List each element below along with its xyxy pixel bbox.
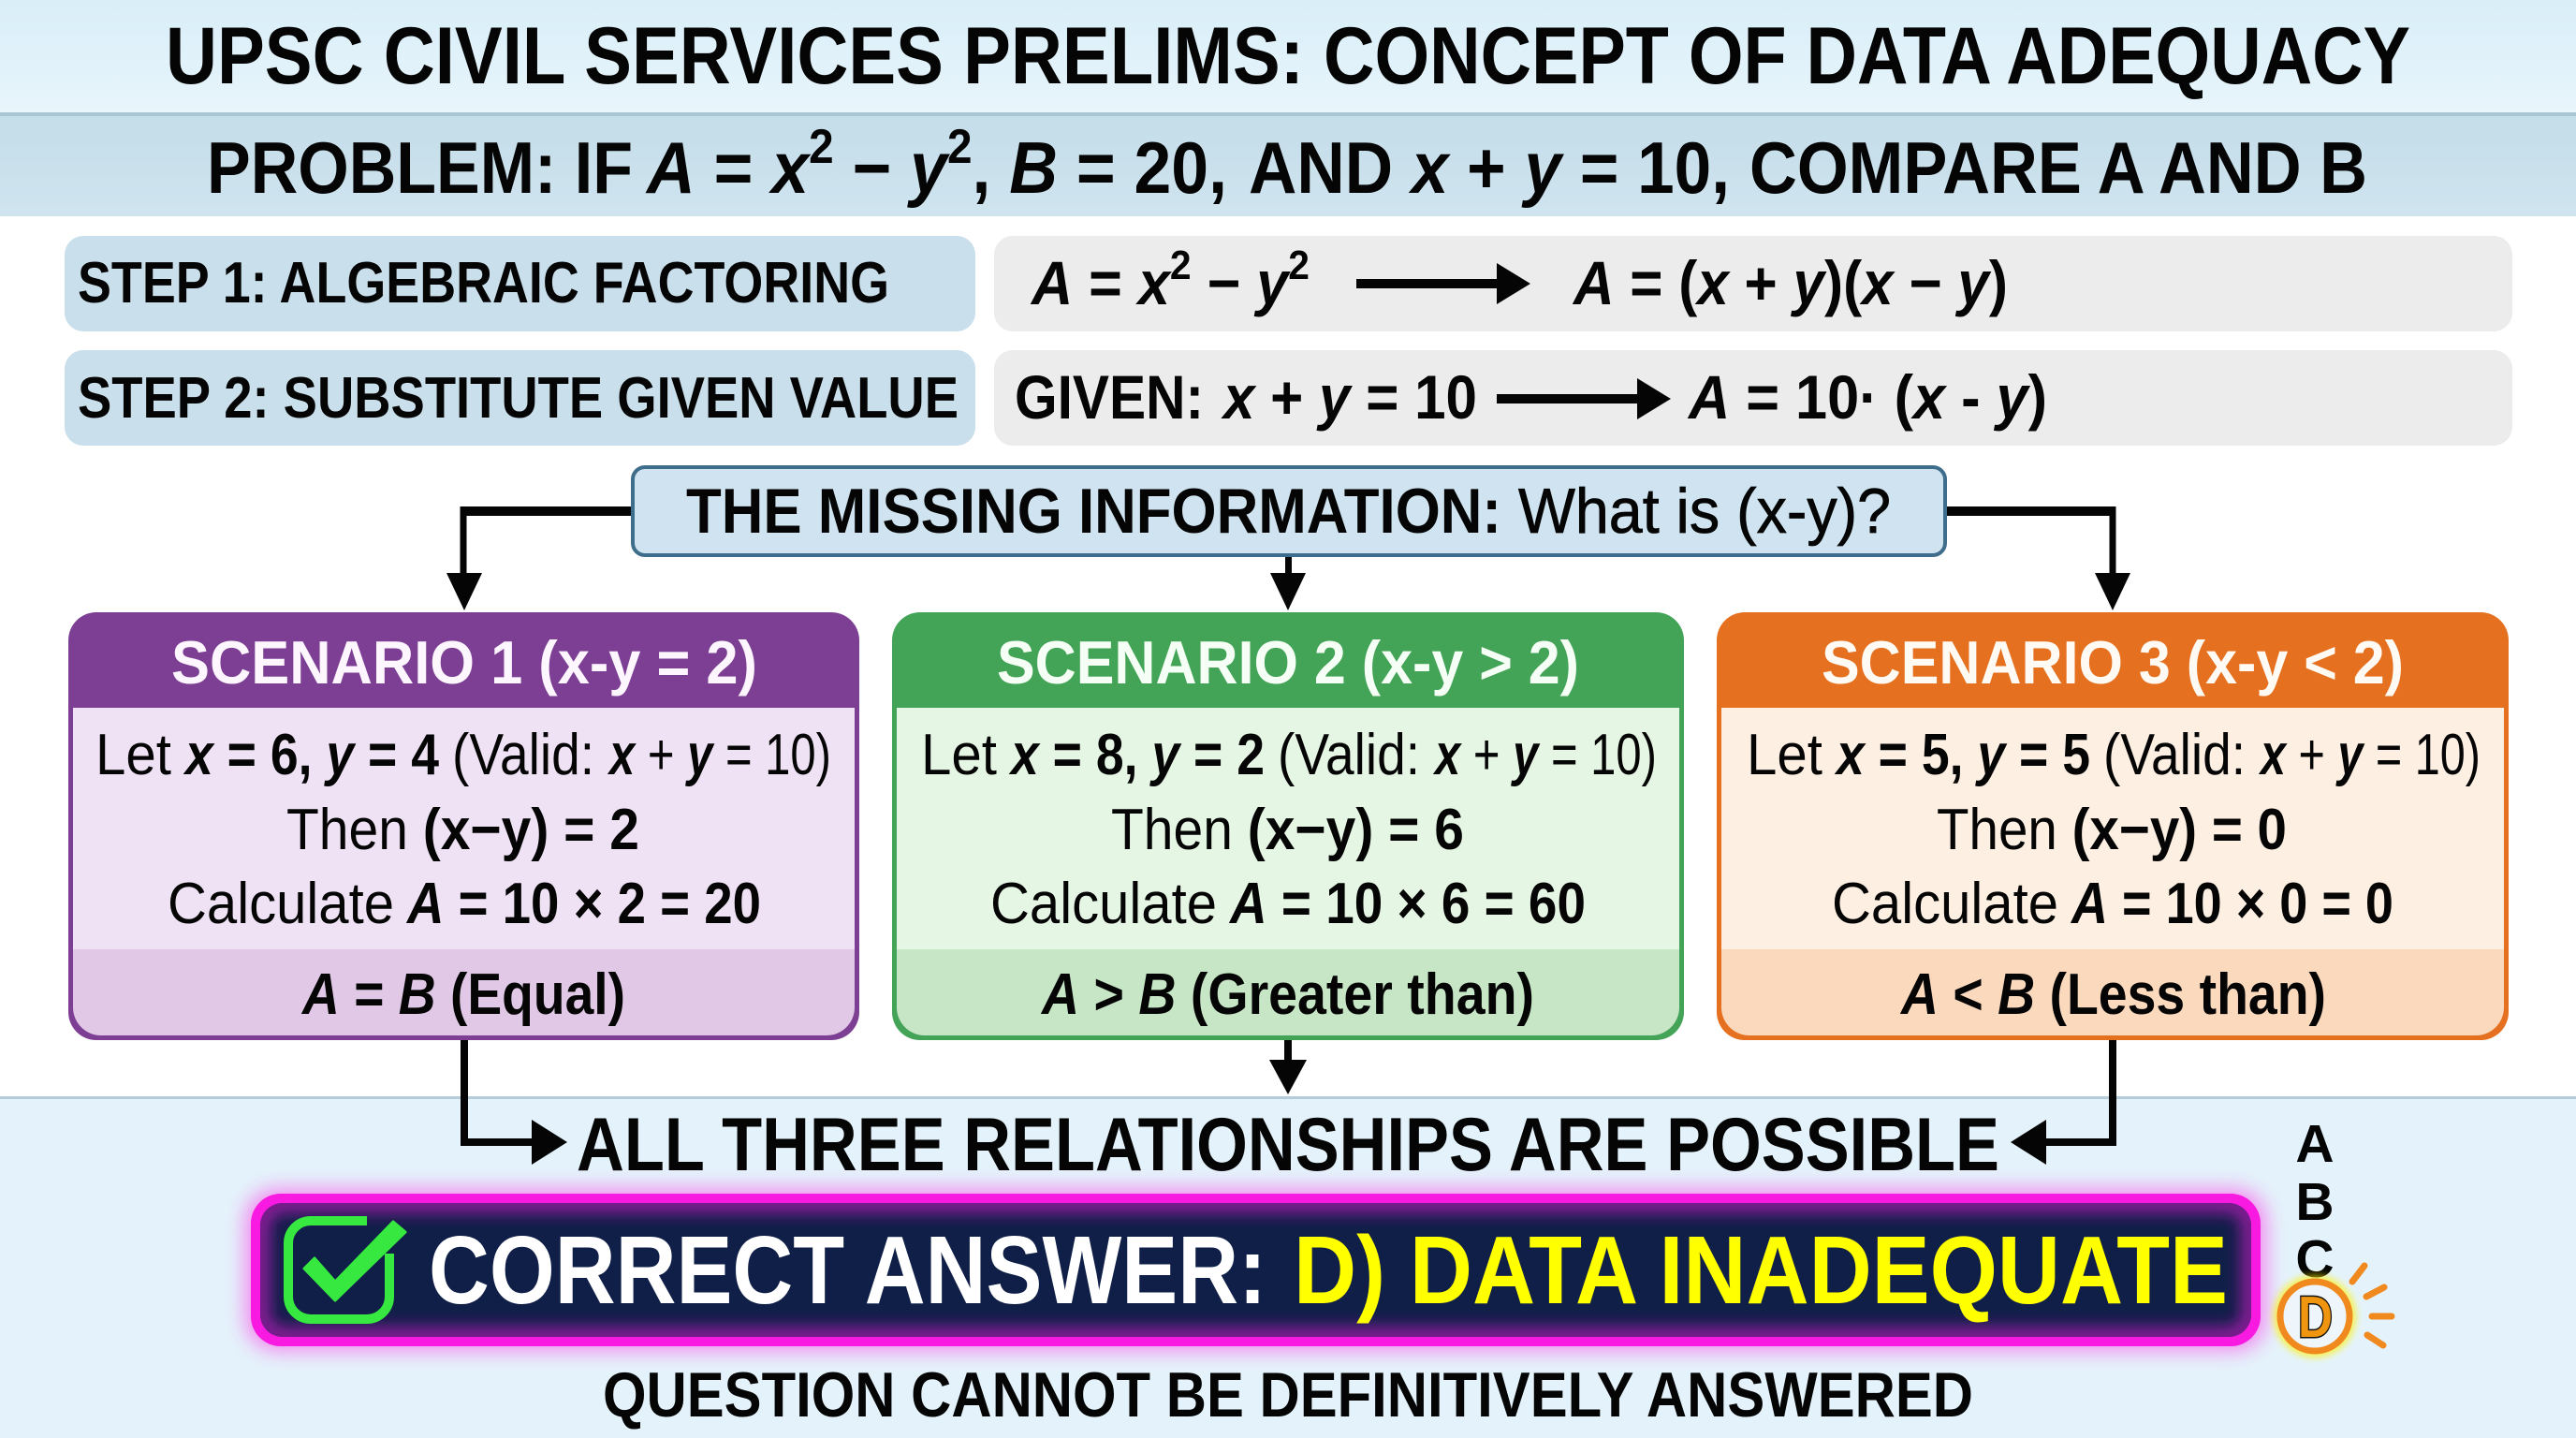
formula: A = x² − y²: A = x <box>1032 248 1173 317</box>
formula: substituted: A = 10· (x - y) <box>1687 362 2047 432</box>
arrow: missing info to scenario 3 <box>1945 506 2130 610</box>
scenario 1 calculation: Calculate <box>168 872 394 936</box>
scenario 1 values <box>95 723 831 787</box>
scenario 2 calculation: Calculate <box>990 872 1217 936</box>
scenario 3 calculation: Calculate <box>1832 872 2058 936</box>
title: CONCEPT OF DATA ADEQUACY <box>1324 11 2410 101</box>
problem statement text: y <box>906 126 950 209</box>
conclusion heading: ALL THREE RELATIONSHIPS ARE POSSIBLE <box>577 1103 1999 1187</box>
icon: green check box <box>288 1221 405 1319</box>
icon: multiple choice options with D highlighted: B <box>2295 1172 2334 1232</box>
formula: A = x² − y²: y <box>1254 248 1291 317</box>
scenario 3 calculation: A = 10 × 0 = 0 <box>2070 872 2393 936</box>
problem statement text: A = x <box>647 126 812 209</box>
scenario 1 difference: Then (x−y) = 2 <box>286 798 639 862</box>
scenario 1 calculation <box>168 872 761 936</box>
scenario 2 values: Let <box>921 723 997 787</box>
problem statement text: COMPARE A AND B <box>1749 126 2367 209</box>
scenario 1 values: Let <box>95 723 171 787</box>
problem statement text: PROBLEM: IF <box>207 126 633 209</box>
callout: the missing information <box>633 467 1945 555</box>
scenario 1 result: A = B (Equal) <box>300 962 625 1027</box>
scenario 3 heading: SCENARIO 3 (x-y < 2) <box>1822 628 2404 697</box>
formula: given <box>1015 362 1477 432</box>
scenario 2 result: A > B (Greater than) <box>1040 962 1534 1027</box>
scenario 3 values <box>1747 723 2481 787</box>
scenario 3 values: x + y = 10) <box>2259 723 2481 787</box>
formula: given: GIVEN: <box>1015 362 1204 432</box>
problem statement text <box>207 120 2367 209</box>
problem statement text: 2 <box>947 120 973 174</box>
panel: step 1 label <box>65 236 975 331</box>
scenario 3 calculation <box>1832 872 2393 936</box>
panel: step 2 label: STEP 2: SUBSTITUTE GIVEN VALUE <box>78 366 959 431</box>
arrow: scenario 1 to conclusion <box>464 1040 567 1165</box>
panel: conclusion background <box>0 1096 2576 1438</box>
scenario 2 values: x = 8, y = 2 <box>1008 723 1265 787</box>
panel: scenario 1 <box>68 612 859 1040</box>
scenario 3 difference: Then (x−y) = 0 <box>1937 798 2287 862</box>
scenario 1 values: x = 6, y = 4 <box>183 723 439 787</box>
problem statement text: , <box>973 126 1009 209</box>
callout: correct answer <box>245 1189 2266 1351</box>
scenario 3 values: Let <box>1747 723 1822 787</box>
scenario 2 values: x + y = 10) <box>1433 723 1657 787</box>
scenario 3 values: (Valid: <box>2103 723 2246 787</box>
formula: A = x² − y²: − <box>1192 248 1256 317</box>
scenario 2 values <box>921 723 1657 787</box>
scenario 2 difference: Then (x−y) = 6 <box>1111 798 1464 862</box>
panel: step 1 label: STEP 1: ALGEBRAIC FACTORING <box>78 251 889 315</box>
panel: step 2 formula <box>994 350 2512 446</box>
problem statement text: AND x + y = 10, <box>1249 126 1730 209</box>
formula: A = x² − y²: 2 <box>1170 242 1192 288</box>
scenario 2 heading: SCENARIO 2 (x-y > 2) <box>997 628 1579 697</box>
arrow: scenario 2 to conclusion <box>1269 1040 1307 1094</box>
problem statement text: B = 20, <box>1009 126 1242 209</box>
arrow: substitute <box>1497 378 1671 419</box>
title: UPSC CIVIL SERVICES PRELIMS: <box>166 11 1304 101</box>
icon: multiple choice options with D highlighted <box>2279 1114 2392 1352</box>
scenario 1 calculation: A = 10 × 2 = 20 <box>405 872 761 936</box>
panel: scenario 2 <box>892 612 1684 1040</box>
scenario 1 values: (Valid: <box>452 723 594 787</box>
scenario 2 calculation <box>990 872 1586 936</box>
panel: step 2 label <box>65 350 975 446</box>
panel: scenario 3 <box>1717 612 2509 1040</box>
formula: factored form: A = (x + y)(x − y) <box>1572 248 2008 317</box>
arrow: factoring <box>1356 263 1530 304</box>
formula: A = x² − y²: 2 <box>1288 242 1310 288</box>
scenario 3 result: A < B (Less than) <box>1899 962 2326 1027</box>
problem statement text: − <box>834 126 910 209</box>
answer label: CORRECT ANSWER: <box>429 1216 1266 1324</box>
arrow: scenario 3 to conclusion <box>2011 1040 2113 1165</box>
icon: multiple choice options with D highlighted: C <box>2295 1229 2334 1289</box>
scenario 2 calculation: A = 10 × 6 = 60 <box>1228 872 1586 936</box>
panel: problem statement band <box>0 112 2576 216</box>
scenario 3 values: x = 5, y = 5 <box>1834 723 2090 787</box>
formula: given: x + y = 10 <box>1221 362 1477 432</box>
arrow: missing info to scenario 1 <box>446 506 633 610</box>
title <box>166 11 2410 101</box>
panel: header background <box>0 0 2576 114</box>
answer value: D) DATA INADEQUATE <box>1294 1216 2228 1324</box>
footer statement: QUESTION CANNOT BE DEFINITIVELY ANSWERED <box>603 1359 1973 1431</box>
problem statement text: 2 <box>809 120 834 174</box>
scenario 2 values: (Valid: <box>1278 723 1420 787</box>
arrow: missing info to scenario 2 <box>1270 556 1306 610</box>
icon: multiple choice options with D highlighted: D <box>2298 1285 2333 1350</box>
panel: step 1 formula <box>994 236 2512 331</box>
scenario 1 heading: SCENARIO 1 (x-y = 2) <box>171 628 757 697</box>
callout: the missing information: What is (x-y)? <box>1518 476 1891 547</box>
callout: the missing information: THE MISSING INFORMATION: <box>686 476 1501 547</box>
scenario 1 values: x + y = 10) <box>607 723 831 787</box>
icon: multiple choice options with D highlighted: A <box>2295 1114 2334 1174</box>
